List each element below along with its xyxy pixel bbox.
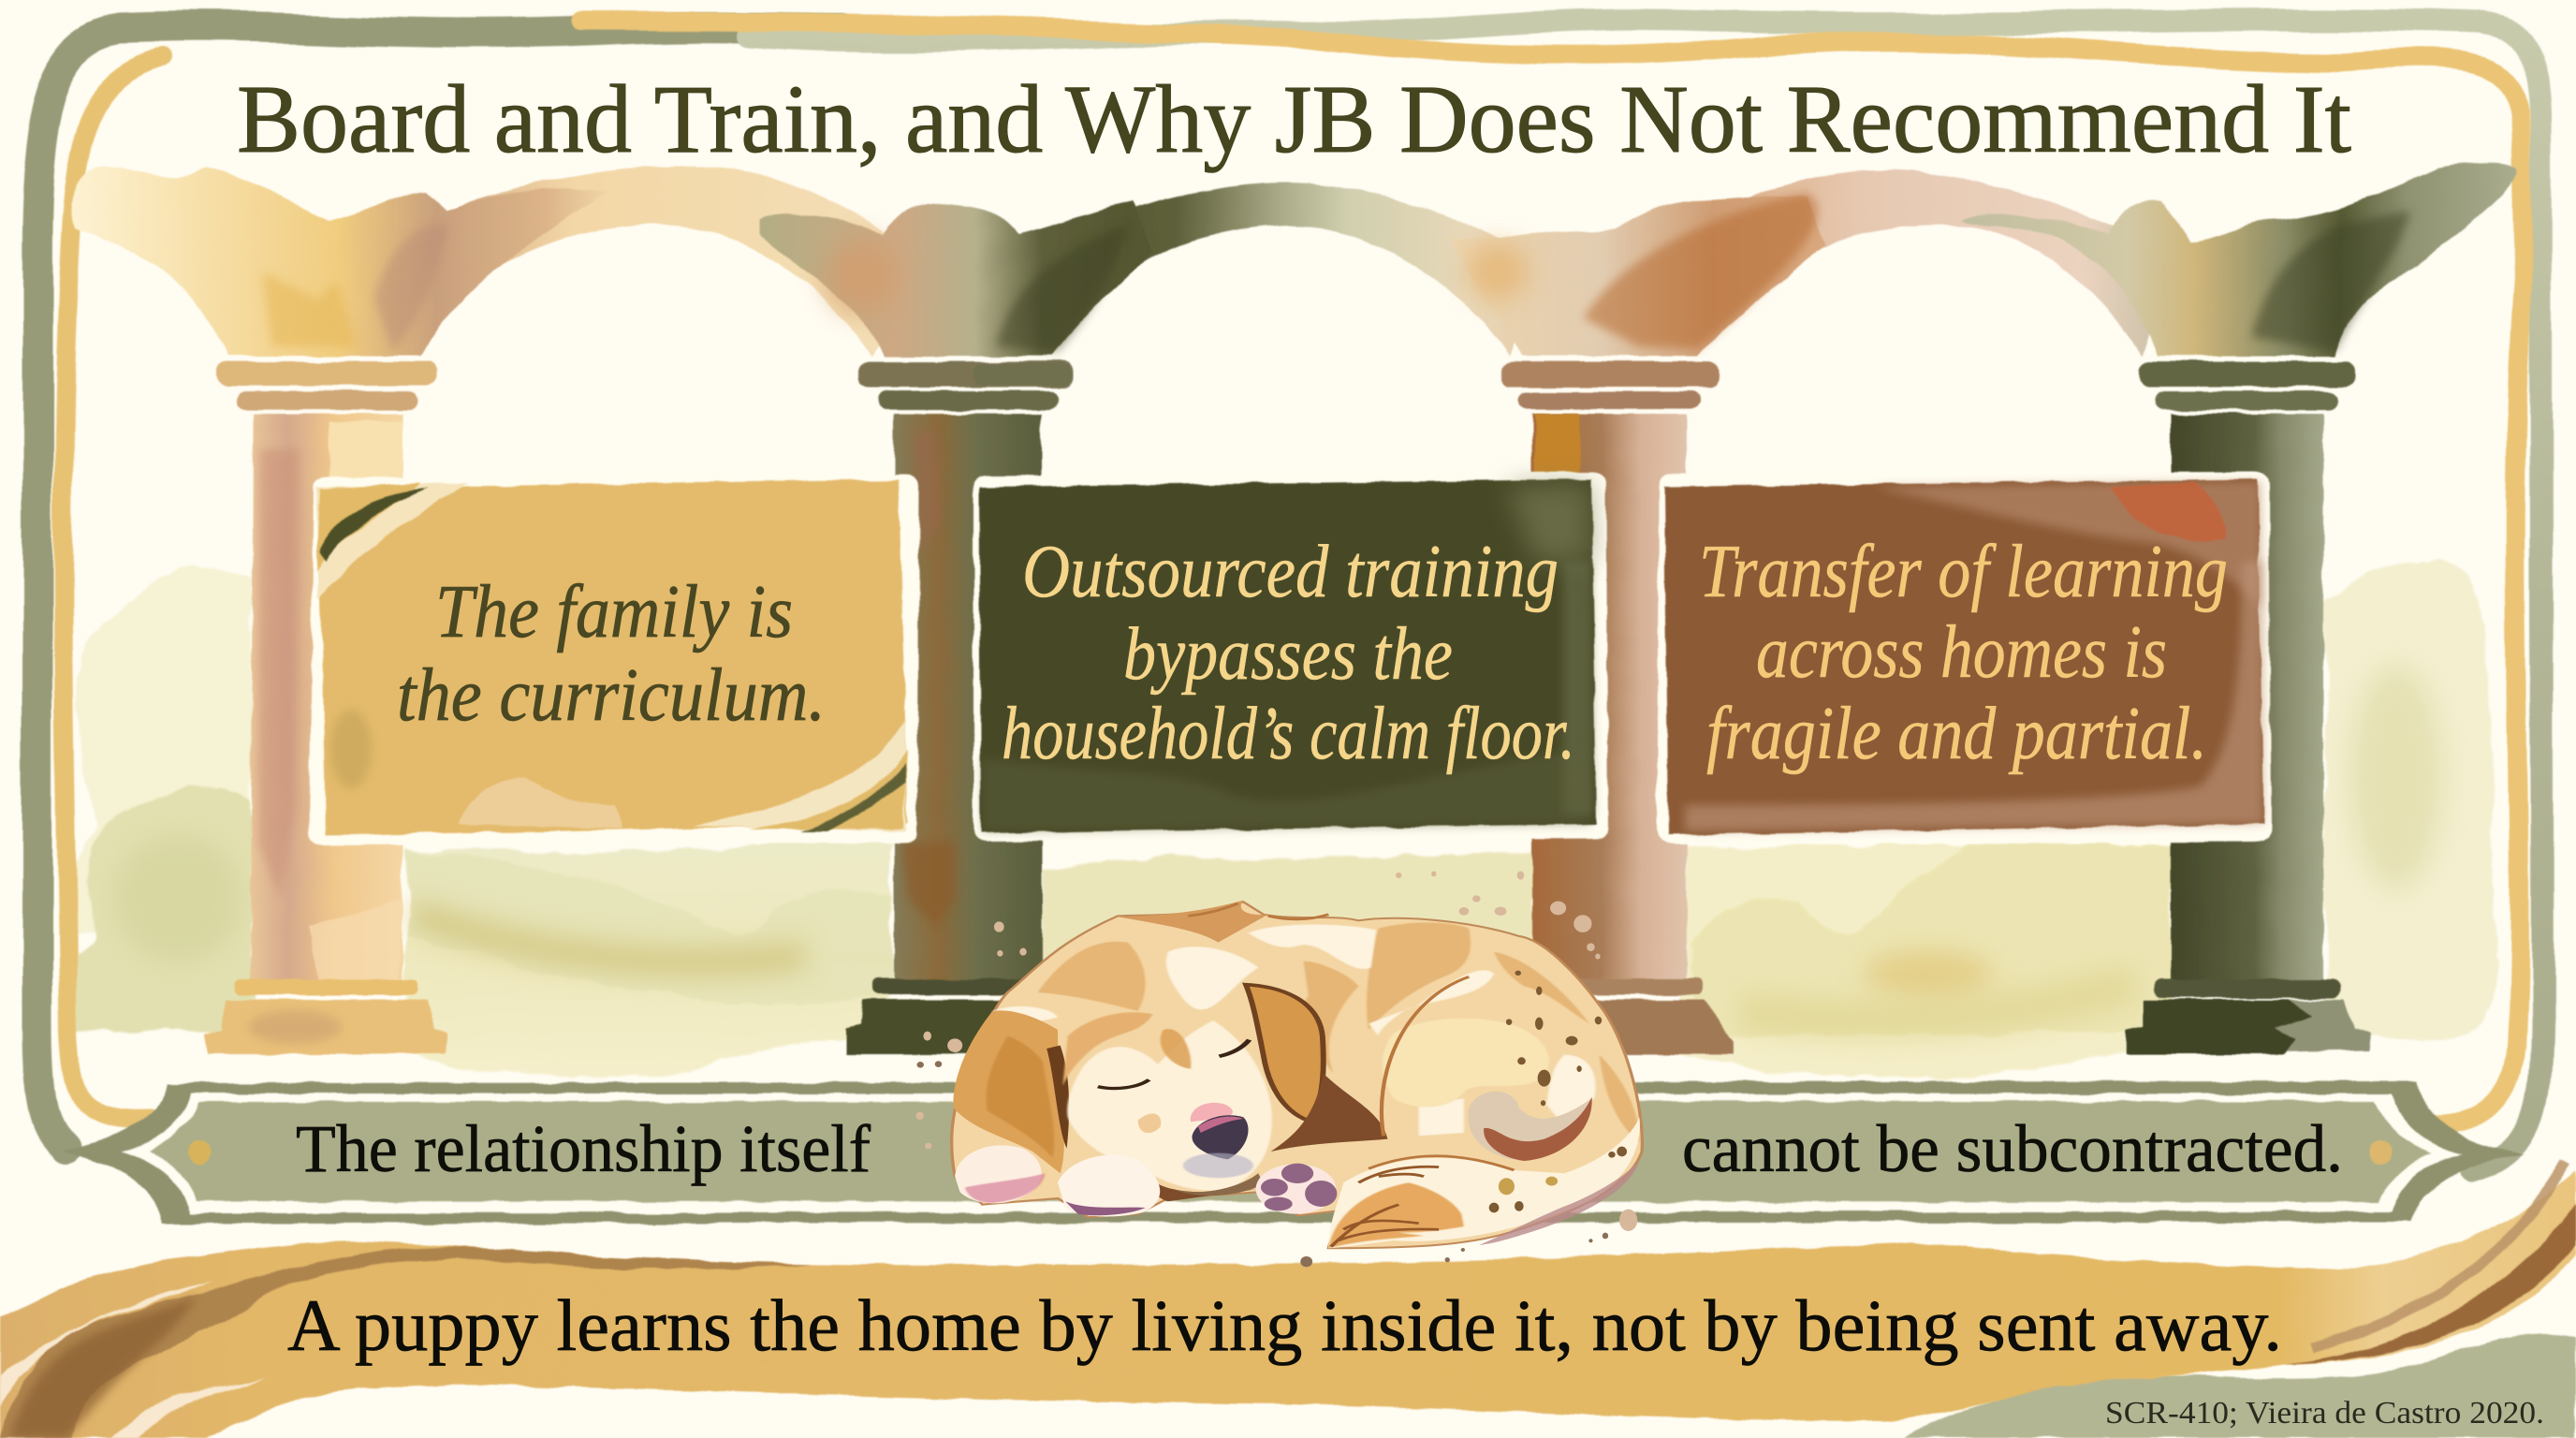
front paw middle [1058, 1155, 1160, 1216]
chin shadow [1183, 1153, 1253, 1178]
panel text: The family is [435, 571, 793, 653]
arch: terracotta span [1685, 170, 2181, 356]
panel: the family is the curriculum [309, 474, 919, 844]
panel: outsourced training [973, 472, 1608, 843]
left ear colour [987, 1036, 1054, 1158]
head colour [1062, 1012, 1153, 1086]
right ear [1246, 985, 1324, 1121]
fur highlights [992, 924, 1596, 1136]
back paw pads [1256, 1164, 1337, 1214]
nose pink [1191, 1103, 1233, 1122]
citation: SCR-410; Vieira de Castro 2020. [2105, 1396, 2544, 1431]
back shading [1038, 922, 1639, 1142]
cheek marking [1138, 1113, 1161, 1133]
front paw left [955, 1145, 1042, 1203]
splatter around puppy [915, 871, 1637, 1231]
speckles gold [1499, 1177, 1558, 1195]
illustration: sleeping puppy [915, 871, 1642, 1267]
head fur tuft [1118, 901, 1268, 943]
muzzle and face [1067, 1020, 1272, 1191]
panel text: fragile and partial. [1706, 693, 2207, 775]
decorative border frame [37, 20, 2542, 1170]
banner text right: cannot be subcontracted. [1682, 1111, 2343, 1186]
banner: the relationship cannot be subcontracted [60, 1081, 2525, 1224]
tail shading [1479, 1161, 1639, 1245]
panel text: across homes is [1756, 611, 2167, 694]
splatter dark [916, 1061, 1608, 1267]
left ear shadow [1046, 1046, 1069, 1149]
ribbon highlight streak [0, 1280, 212, 1409]
ribbon: bottom message [0, 1161, 2576, 1438]
ribbon highlight streak [110, 1379, 266, 1438]
tail tuft [1328, 1182, 1464, 1248]
ribbon tail [2284, 1203, 2576, 1365]
puppy body [952, 902, 1642, 1248]
olive wash bottom right [1904, 1333, 2576, 1438]
nose highlight [1198, 1117, 1243, 1133]
paw tint [965, 1173, 1046, 1203]
closed eye [1219, 1040, 1250, 1056]
banner text left: The relationship itself [296, 1111, 871, 1186]
column 3: terracotta [1452, 193, 1825, 1054]
flank crescent [1484, 1097, 1592, 1161]
under-chin shadow [1062, 1156, 1258, 1201]
mouth [1173, 1173, 1264, 1196]
closed eye [1098, 1079, 1149, 1089]
arch: olive span [1053, 183, 1544, 356]
ribbon text: A puppy learns the home by living inside it, not by being sent away. [287, 1284, 2282, 1366]
chest shadow [1271, 1074, 1387, 1152]
speckles on body [1489, 971, 1627, 1212]
banner ornament [2370, 1139, 2393, 1164]
panel text: bypasses the [1123, 613, 1453, 696]
flank patch [1468, 1092, 1592, 1161]
paw tint [1065, 1201, 1146, 1215]
tail brush strokes [1331, 1167, 1439, 1247]
left ear [953, 1010, 1064, 1173]
title: Board and Train, and Why JB Does Not Recommend It [237, 66, 2351, 173]
arch: gold span [418, 166, 936, 356]
panel: transfer of learning [1657, 472, 2271, 844]
panel text: household’s calm floor. [1002, 693, 1575, 775]
panel text: Outsourced training [1022, 531, 1559, 613]
column 1: gold [72, 167, 608, 1054]
nose [1192, 1115, 1249, 1159]
tail [1328, 1117, 1640, 1248]
panel text: Transfer of learning [1699, 531, 2228, 613]
banner ornament [189, 1140, 212, 1165]
panel text: the curriculum. [397, 654, 826, 737]
column 2: olive [760, 201, 1151, 1054]
haunch [1383, 1019, 1549, 1108]
fur strokes [1188, 903, 1514, 1170]
forehead marking [1161, 1029, 1191, 1069]
column 4: dark olive [1961, 162, 2518, 1054]
background watercolor washes [64, 560, 2499, 1079]
